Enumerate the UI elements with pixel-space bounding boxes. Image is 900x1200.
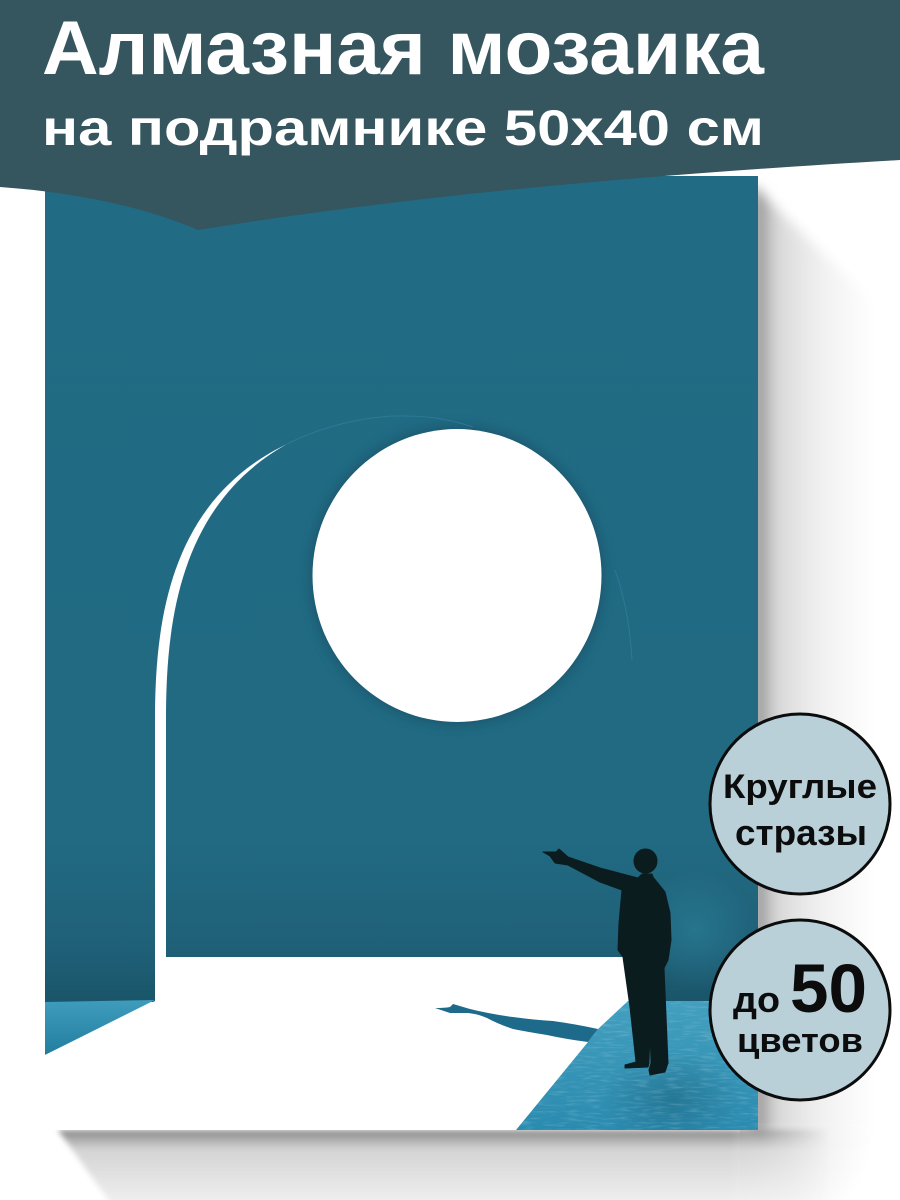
canvas corner shadow	[740, 1125, 900, 1200]
badge text line 1: Круглые	[723, 768, 877, 806]
panel: mosaic canvas artwork	[45, 176, 760, 1150]
canvas bottom shadow	[58, 1130, 900, 1200]
faint arch outline right	[615, 570, 632, 660]
canvas right-side shadow	[748, 182, 844, 1137]
soft shadow around the circle	[310, 426, 604, 724]
banner shape	[0, 0, 900, 230]
silhouette of pointing man	[543, 849, 671, 1075]
body and arm	[543, 849, 671, 1075]
title: Алмазная мозаика	[42, 6, 765, 91]
badge: round rhinestones	[710, 714, 890, 894]
head	[634, 849, 657, 873]
white floor	[45, 957, 629, 1130]
header banner	[0, 0, 900, 230]
right teal floor	[516, 1001, 758, 1130]
floor ripple texture	[510, 1001, 760, 1130]
left floor wedge	[45, 1000, 155, 1055]
lighter glow on wall beside figure	[669, 897, 731, 970]
badge text line 2: стразы	[735, 812, 867, 853]
badge circle	[710, 920, 890, 1100]
subtitle: на подрамнике 50х40 см	[42, 100, 764, 156]
badge: up to 50 colours	[710, 920, 890, 1100]
badge text: colours: цветов	[737, 1022, 863, 1060]
teal wall background	[45, 176, 758, 1002]
white moon circle	[312, 429, 602, 722]
badge number 50: 50	[790, 950, 867, 1027]
figure shadow on floor	[435, 1004, 598, 1042]
faint arch outline left	[287, 416, 473, 444]
white arch sliver	[155, 444, 287, 1001]
floor darker patch under figure	[623, 1064, 722, 1130]
badge text: up to: до	[733, 979, 780, 1020]
badge circle	[710, 714, 890, 894]
